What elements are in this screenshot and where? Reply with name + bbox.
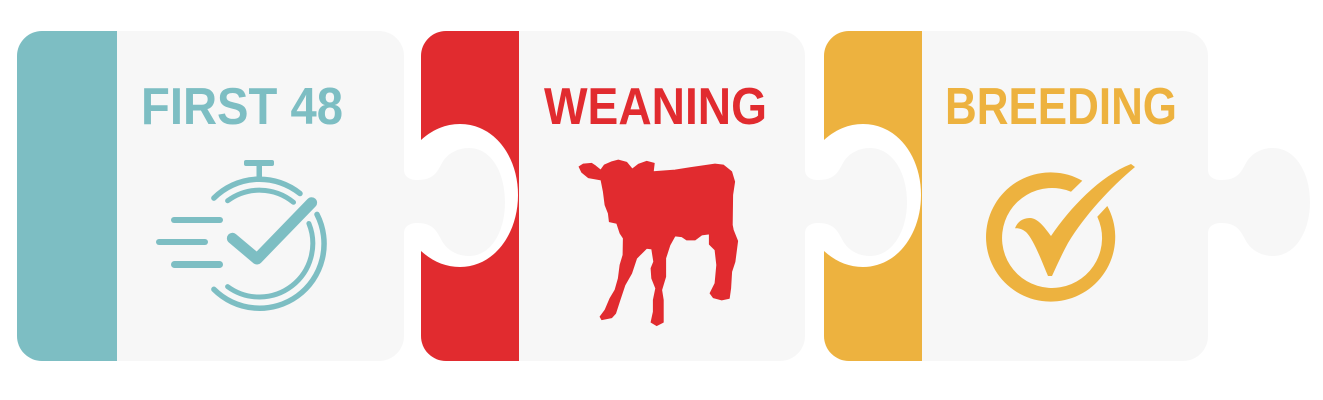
- icon: calf silhouette: [579, 160, 738, 326]
- red band: [421, 31, 519, 361]
- panel: first 48 puzzle piece: [17, 31, 505, 361]
- amber band: [824, 31, 922, 361]
- piece background with right knob: [17, 31, 505, 361]
- panel: breeding puzzle piece: [824, 31, 1310, 361]
- heading: first 48: FIRST 48: [141, 78, 343, 136]
- icon: circled check mark: [986, 164, 1135, 302]
- heading: weaning: WEANING: [544, 78, 767, 136]
- icon: stopwatch with check mark: [159, 160, 324, 308]
- socket cutout: [824, 124, 921, 267]
- heading: breeding: BREEDING: [945, 78, 1177, 136]
- socket cutout: [421, 124, 518, 267]
- piece background with right knob: [421, 31, 907, 361]
- panel: weaning puzzle piece: [421, 31, 907, 361]
- teal band: [17, 31, 117, 361]
- piece background with right knob: [824, 31, 1310, 361]
